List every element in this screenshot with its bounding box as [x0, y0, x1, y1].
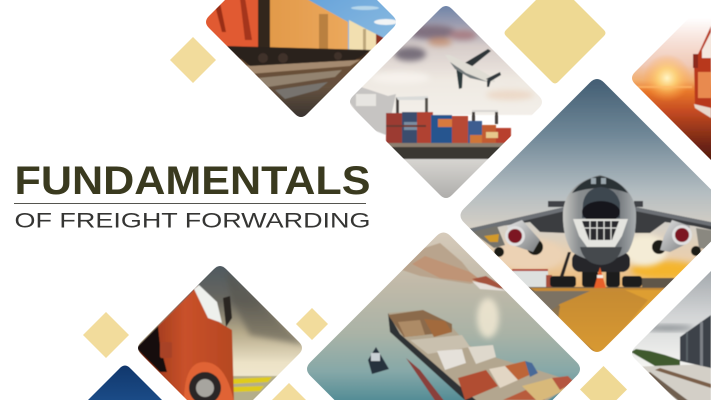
wings: [468, 201, 711, 234]
chin: [580, 247, 622, 265]
cargo ship hull: [388, 313, 476, 400]
photo panel: freight wagons at railyard: [625, 262, 711, 400]
ship deck and containers: [388, 310, 575, 400]
horizon building: [512, 268, 675, 288]
fuselage: [563, 175, 636, 261]
right engine group: [652, 220, 711, 256]
water: [404, 158, 488, 198]
photo panel: cargo aircraft on runway: [455, 74, 711, 357]
photo panel: container ship aerial view: [300, 228, 590, 400]
freight wagon: [680, 315, 711, 368]
landing gear: [550, 252, 642, 287]
dark front corner: [136, 326, 167, 372]
decorative gold diamond, lower left: [83, 312, 129, 358]
ship superstructure: [348, 86, 498, 135]
cab windshield: [194, 285, 222, 323]
decorative gold diamond, top centre: [504, 0, 606, 84]
side mirror: [223, 296, 232, 327]
nose radome: [582, 187, 620, 218]
decorative gold diamond, bottom edge: [272, 383, 306, 400]
cream wagon: [349, 20, 376, 52]
orange wagon: [270, 0, 348, 52]
left engine group: [472, 220, 543, 257]
photo panel: red truck: [138, 266, 302, 400]
heading: fundamentals: FUNDAMENTALS: [14, 159, 370, 203]
cone: [594, 267, 606, 288]
decorative gold diamond, small: [296, 308, 328, 340]
aircraft: [468, 175, 711, 288]
runway: [528, 286, 666, 352]
decorative gold diamond, bottom right: [580, 366, 627, 400]
red wagon: [200, 0, 258, 47]
tree line: [631, 349, 680, 368]
undercarriage: [225, 46, 372, 66]
road stripe: [230, 376, 280, 400]
truck cab: [136, 286, 234, 400]
subtitle: of freight forwarding: OF FREIGHT FORWARDING: [14, 208, 370, 232]
tugboat: [368, 347, 389, 374]
sun glare: [477, 298, 499, 338]
gravel and rails: [625, 364, 711, 400]
photo panel: blue corner: [80, 360, 170, 400]
bombardier windows: [573, 219, 628, 247]
photo panel: freight train: [206, 0, 396, 117]
truck cab: [693, 26, 711, 118]
ground and rails: [230, 49, 370, 117]
cockpit: [572, 176, 628, 193]
stacked containers: [386, 112, 511, 147]
distant port: [402, 243, 507, 291]
clouds: [370, 25, 534, 100]
photo panel: cargo plane over container ship: [350, 6, 542, 198]
title block: [14, 159, 370, 232]
airplane: [445, 49, 501, 89]
ship hull: [392, 146, 500, 160]
decorative gold diamond, upper left: [170, 37, 216, 83]
wheel arch and wheel: [184, 362, 234, 400]
photo panel: sunset truck: [632, 23, 711, 160]
